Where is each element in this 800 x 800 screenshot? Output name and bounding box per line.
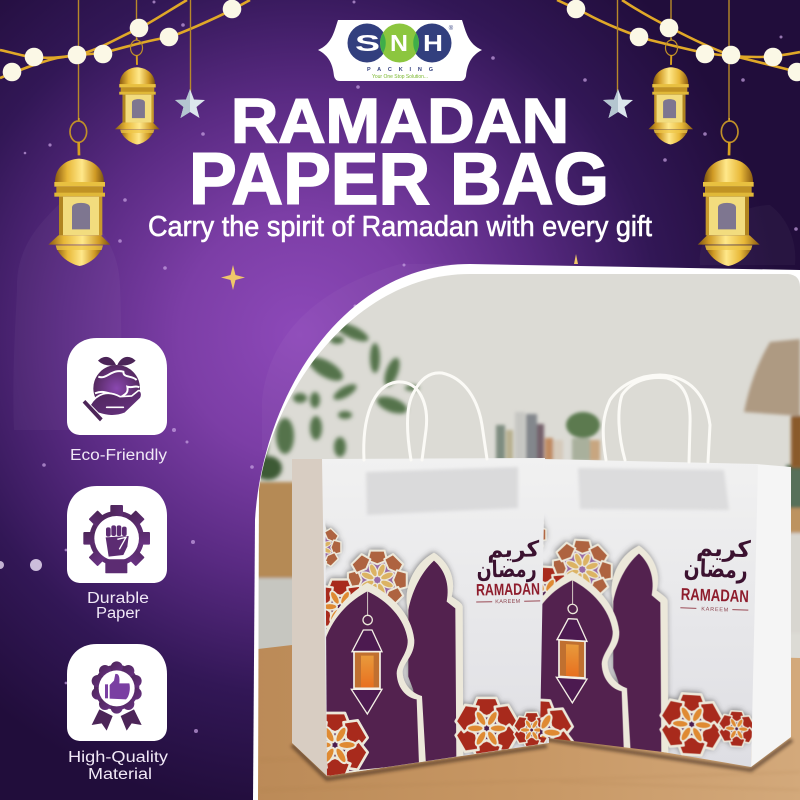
left kareem rules <box>476 601 540 602</box>
title: PAPER BAG <box>189 139 609 220</box>
feature: high-quality material <box>67 644 168 783</box>
eco label: Eco-Friendly <box>70 447 167 464</box>
hanging star right <box>603 89 633 118</box>
left bag tape patch <box>366 467 518 515</box>
left bag <box>292 458 551 777</box>
icon: globe on hand with sprout <box>83 357 142 421</box>
photo panel <box>250 270 800 800</box>
right calligraphy: كريم <box>696 535 752 563</box>
left bag greeting <box>475 537 540 606</box>
blurred books and vase <box>496 412 600 461</box>
logo: SNH Packing: PACKING <box>367 67 433 73</box>
eco icon tile <box>67 338 167 435</box>
durable label: Paper <box>96 605 140 622</box>
cabinet and floor left <box>250 465 800 658</box>
right ramadan word: RAMADAN <box>680 585 749 606</box>
garland lights <box>3 0 800 81</box>
icon: fist in gear <box>83 505 150 573</box>
feature: eco-friendly <box>67 338 167 464</box>
hanging star left <box>175 89 205 118</box>
wall <box>250 270 800 670</box>
right calligraphy <box>684 540 751 584</box>
paper handles <box>364 373 710 462</box>
left ramadan word: RAMADAN <box>476 580 540 600</box>
left calligraphy <box>476 537 540 584</box>
lantern: small right <box>648 38 693 145</box>
right bag artwork <box>540 518 752 758</box>
title: RAMADAN <box>231 86 569 156</box>
logo: SNH Packing <box>318 20 482 81</box>
subtitle: Carry the spirit of Ramadan with every gift <box>148 211 652 243</box>
right bag side panel <box>751 464 791 767</box>
lantern: small left <box>115 38 160 145</box>
left calligraphy: كريم <box>487 537 540 563</box>
right bag <box>503 459 791 777</box>
right bag tape patch <box>578 468 729 510</box>
garland strings <box>0 0 800 78</box>
durable label: Durable <box>87 590 149 607</box>
lantern: large left <box>48 118 110 266</box>
logo: SNH Packing: N <box>390 30 408 56</box>
logo: SNH Packing: S <box>355 30 380 56</box>
table <box>250 645 800 800</box>
right calligraphy: رمضان <box>683 554 748 584</box>
blurred lamp <box>744 339 800 468</box>
bright bokeh dots <box>0 559 42 571</box>
title <box>189 86 609 220</box>
logo: SNH Packing: Your One Stop Solution... <box>372 74 428 80</box>
icon: rosette badge with thumbs up <box>92 661 142 731</box>
photo panel white frame <box>253 264 800 800</box>
hanging threads <box>78 0 729 120</box>
table grain <box>260 758 800 790</box>
left bag front <box>322 458 549 776</box>
left bag side panel <box>292 459 327 776</box>
right kareem word: KAREEM <box>701 607 729 613</box>
quality label: Material <box>88 766 152 783</box>
right kareem rules <box>680 608 748 610</box>
gold sparkle stars <box>221 254 578 290</box>
logo: SNH Packing: H <box>423 30 443 56</box>
bag ground shadows <box>292 739 792 779</box>
logo: SNH Packing: ® <box>449 25 454 32</box>
faint mosque silhouettes <box>13 195 795 450</box>
left kareem word: KAREEM <box>495 599 521 605</box>
left bag artwork <box>298 526 551 777</box>
right bag greeting <box>680 535 752 614</box>
blurred plant <box>254 319 419 480</box>
left calligraphy: رمضان <box>476 556 537 584</box>
quality icon tile <box>67 644 167 741</box>
feature: durable paper <box>67 486 167 622</box>
quality label: High-Quality <box>68 749 168 766</box>
right bag front <box>543 459 758 767</box>
lantern: large right <box>698 118 760 266</box>
durable icon tile <box>67 486 167 583</box>
